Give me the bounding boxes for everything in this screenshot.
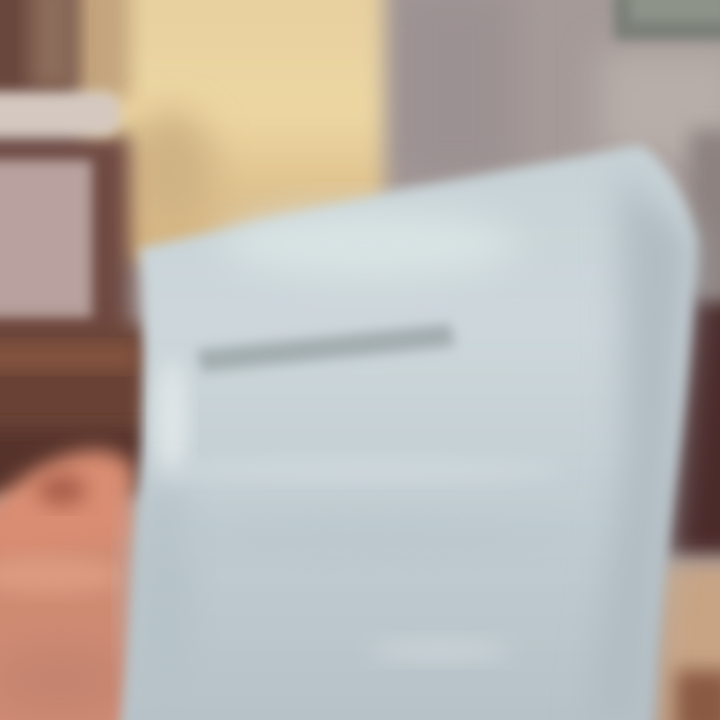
hand: left bottom — [0, 450, 140, 720]
pillow: left bright edge — [156, 360, 188, 480]
pillow: main body — [118, 145, 696, 720]
pillow: right shade — [590, 170, 695, 720]
furniture: left shelf — [0, 0, 150, 495]
pillow: top highlight — [220, 210, 520, 280]
pillow: left lower shade — [135, 480, 195, 720]
pillow: blurred label smudge — [197, 324, 455, 372]
furniture: right dark side — [655, 130, 720, 720]
pillow: lower bands — [160, 458, 560, 482]
lamp glow: cream panel — [70, 0, 384, 260]
picture frame: top right — [614, 0, 720, 40]
